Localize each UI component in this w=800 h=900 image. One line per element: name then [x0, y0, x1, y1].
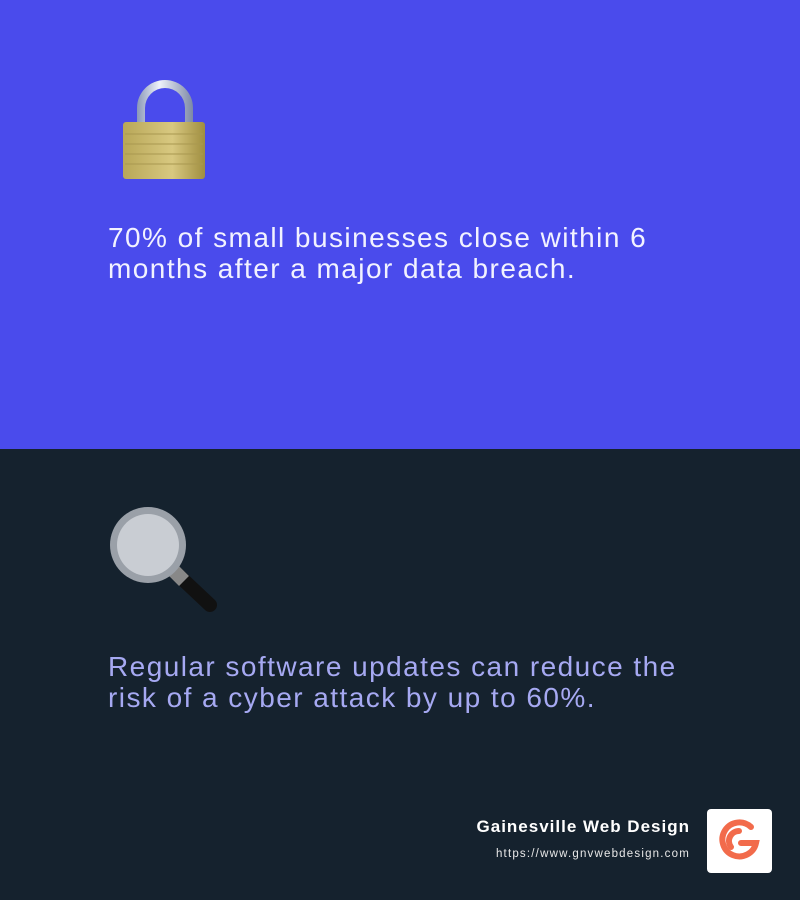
brand url: https://www.gnvwebdesign.com — [496, 848, 690, 860]
icon: padlock — [123, 80, 205, 179]
text: updates statistic: Regular software updates can reduce the — [108, 651, 677, 682]
text: updates statistic — [108, 651, 677, 713]
text: breach statistic: months after a major data breach. — [108, 253, 576, 284]
panel: top statistic — [0, 0, 800, 449]
panel: bottom statistic — [0, 449, 800, 900]
logo — [707, 809, 772, 873]
brand name: Gainesville Web Design — [477, 817, 690, 836]
text: breach statistic: 70% of small businesses close within 6 — [108, 222, 647, 253]
icon: magnifying glass — [110, 507, 217, 612]
text: breach statistic — [108, 222, 647, 284]
footer: brand — [477, 809, 772, 873]
text: updates statistic: risk of a cyber attack by up to 60%. — [108, 682, 596, 713]
